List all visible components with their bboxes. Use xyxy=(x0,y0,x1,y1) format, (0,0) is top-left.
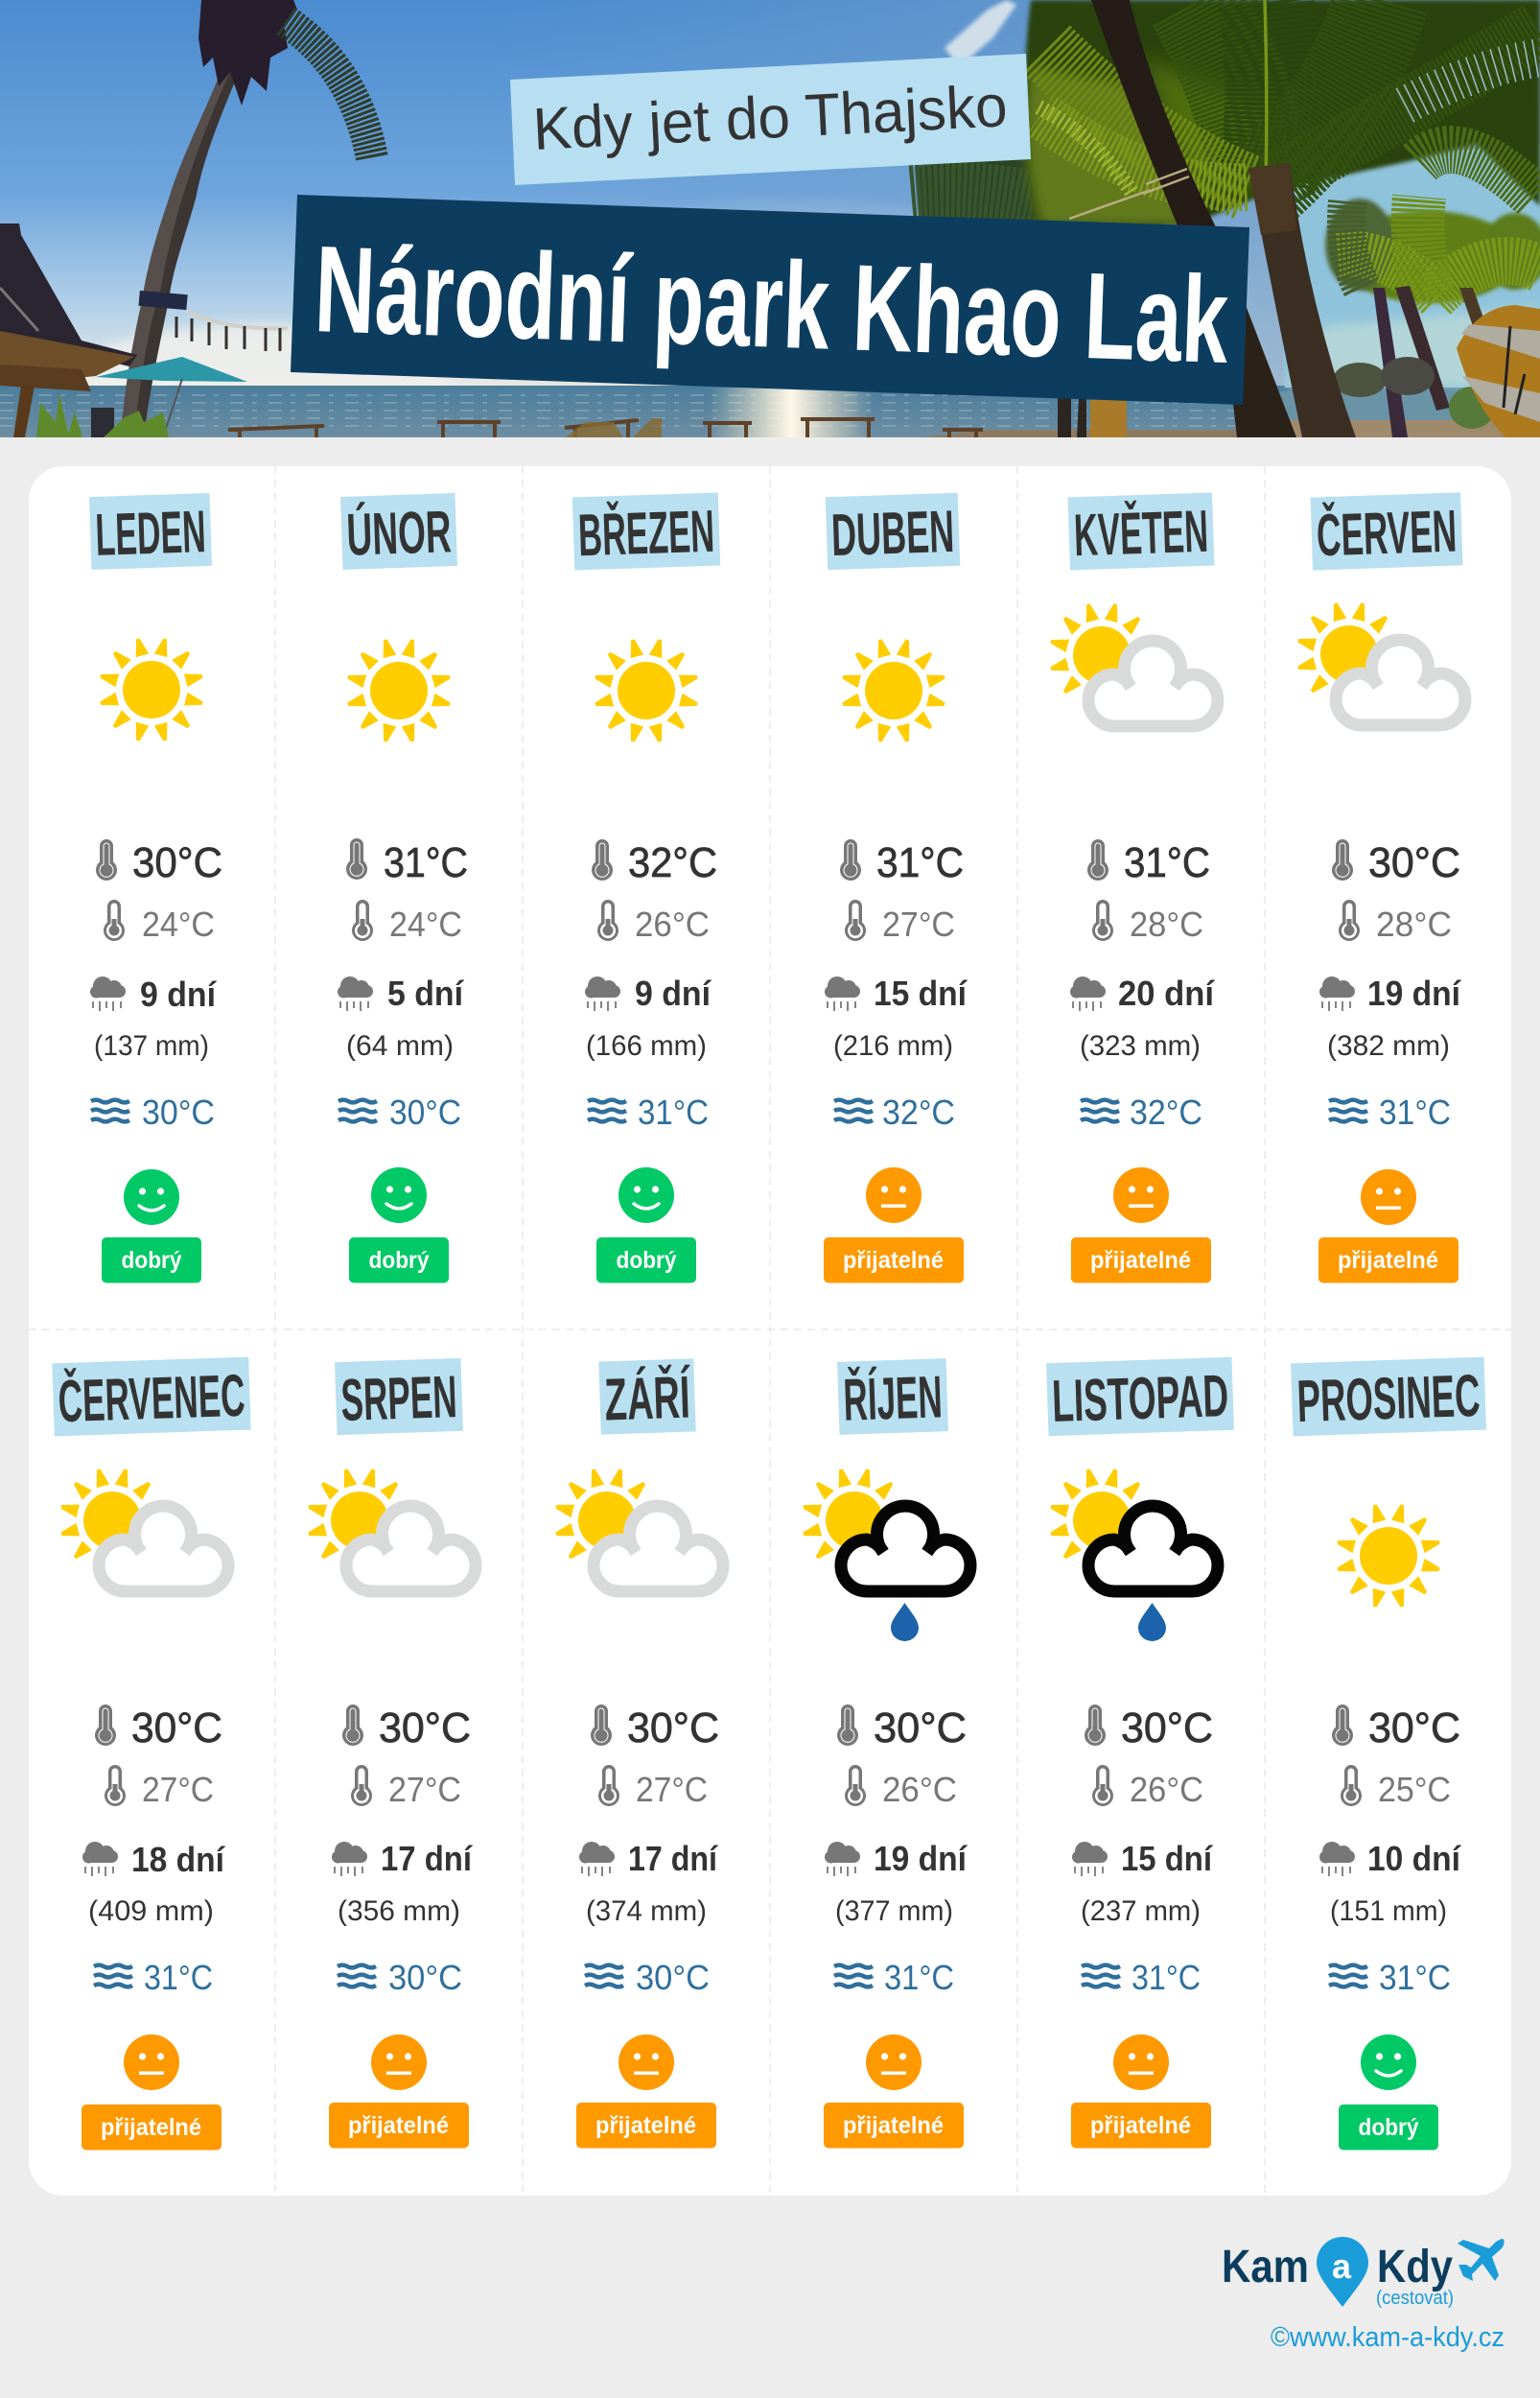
right trunks xyxy=(1091,0,1220,235)
sea temperature: 30°C xyxy=(142,1093,215,1132)
low temperature: 27°C xyxy=(636,1770,708,1809)
low temperature: 24°C xyxy=(389,905,462,944)
rating icon xyxy=(1361,2034,1416,2090)
rainy days xyxy=(90,975,217,1014)
sea temperature: 31°C xyxy=(884,1958,954,1997)
rating badge: přijatelné xyxy=(843,1247,944,1274)
rainy days xyxy=(825,974,968,1013)
high temperature xyxy=(592,839,717,886)
rainy days: 19 dní xyxy=(1367,974,1461,1013)
panel: Červenec xyxy=(52,1357,251,2151)
back palm xyxy=(913,159,1164,224)
low temperature: 28°C xyxy=(1130,905,1203,944)
month label: ČERVENEC xyxy=(57,1363,246,1435)
rating icon xyxy=(618,1167,674,1223)
header photo: beach with palms xyxy=(0,0,1540,437)
logo: Kam a Kdy xyxy=(1222,2237,1505,2309)
small trunks under banner xyxy=(1058,398,1086,437)
rainy days: 9 dní xyxy=(635,974,712,1013)
low temperature: 25°C xyxy=(1378,1770,1451,1809)
rating badge: přijatelné xyxy=(843,2112,944,2139)
rainy days: 15 dní xyxy=(1121,1839,1213,1878)
rainy days: 17 dní xyxy=(628,1839,718,1878)
rating badge: dobrý xyxy=(1358,2114,1419,2141)
sea temperature xyxy=(834,1093,955,1132)
sea temperature xyxy=(91,1093,215,1132)
rating icon xyxy=(371,1167,427,1223)
high temperature: 30°C xyxy=(379,1704,471,1751)
sea temperature xyxy=(94,1958,213,1997)
high temperature: 30°C xyxy=(1368,1704,1460,1751)
logo: Kam a Kdy: (cestovat) xyxy=(1376,2288,1454,2309)
rating icon xyxy=(1113,1167,1169,1223)
icon: sun xyxy=(1336,1503,1441,1609)
rainy days: 18 dní xyxy=(131,1840,225,1879)
rainy days xyxy=(332,1839,473,1878)
low temperature: 26°C xyxy=(882,1770,957,1809)
month label xyxy=(1046,1357,1234,1436)
icon: sun xyxy=(594,638,699,743)
rating icon xyxy=(866,2034,922,2090)
rating badge: přijatelné xyxy=(101,2114,201,2141)
sea temperature: 32°C xyxy=(882,1093,955,1132)
month label: ŘÍJEN xyxy=(842,1364,944,1434)
subtitle banner xyxy=(510,54,1031,185)
month label: BŘEZEN xyxy=(577,499,715,569)
rainfall amount: (137 mm) xyxy=(94,1030,209,1062)
low temperature xyxy=(845,1765,957,1809)
rainy days xyxy=(1070,974,1215,1013)
distant right sky xyxy=(1275,144,1540,388)
icon: airplane xyxy=(1458,2239,1505,2281)
month label xyxy=(335,1358,463,1435)
rating icon xyxy=(371,2034,427,2090)
low temperature xyxy=(845,900,955,944)
icon: sun xyxy=(99,637,204,742)
rating icon xyxy=(124,1169,179,1225)
high temperature xyxy=(95,1704,222,1751)
rainy days: 9 dní xyxy=(140,975,217,1014)
rating badge xyxy=(596,1237,696,1283)
icon: sun xyxy=(841,638,946,743)
panel: Říjen xyxy=(802,1358,970,2149)
month label: ÚNOR xyxy=(345,499,453,569)
sea temperature xyxy=(338,1093,461,1132)
rainy days xyxy=(1319,1839,1461,1878)
sea temperature: 31°C xyxy=(1132,1958,1201,1997)
rainfall amount: (374 mm) xyxy=(586,1895,707,1927)
low temperature xyxy=(1339,900,1452,944)
low temperature: 27°C xyxy=(882,905,955,944)
rating badge: přijatelné xyxy=(1090,1247,1191,1274)
month label xyxy=(1311,492,1462,571)
month label xyxy=(1068,493,1214,570)
month label: SRPEN xyxy=(339,1364,458,1434)
month label xyxy=(826,493,960,570)
rating icon xyxy=(1361,1169,1416,1225)
low temperature: 28°C xyxy=(1376,905,1452,944)
panel: Leden xyxy=(89,493,222,1283)
rainy days xyxy=(825,1839,968,1878)
rating badge xyxy=(1318,1237,1458,1283)
panel: Duben xyxy=(824,493,968,1283)
rainfall amount: (377 mm) xyxy=(835,1895,953,1927)
rainy days: 20 dní xyxy=(1118,974,1215,1013)
icon: sun behind cloud xyxy=(554,1468,723,1591)
high temperature xyxy=(1087,839,1210,886)
month label: LISTOPAD xyxy=(1051,1363,1229,1435)
low temperature: 27°C xyxy=(142,1770,214,1809)
rating badge xyxy=(1071,1237,1211,1283)
rating badge xyxy=(102,1237,201,1283)
sea temperature: 30°C xyxy=(388,1958,462,1997)
rainy days: 5 dní xyxy=(387,974,464,1013)
month label: DUBEN xyxy=(830,499,955,569)
rainy days xyxy=(82,1840,225,1879)
rating icon xyxy=(618,2034,674,2090)
big palm mass xyxy=(1025,0,1540,225)
rating badge xyxy=(1339,2104,1438,2151)
low temperature xyxy=(104,900,215,944)
low temperature xyxy=(1341,1765,1451,1809)
icon: sun behind cloud xyxy=(59,1468,228,1591)
sea temperature xyxy=(338,1958,462,1997)
rating badge: přijatelné xyxy=(348,2112,449,2139)
low temperature xyxy=(105,1765,214,1809)
logo: Kam a Kdy: Kam xyxy=(1222,2242,1309,2292)
rainfall amount: (216 mm) xyxy=(833,1030,953,1062)
high temperature: 31°C xyxy=(1124,839,1210,886)
rating icon xyxy=(866,1167,922,1223)
panel: Prosinec xyxy=(1291,1357,1486,2151)
month label xyxy=(837,1358,948,1435)
month label xyxy=(572,493,720,570)
panel: Březen xyxy=(572,493,720,1283)
left palm xyxy=(122,72,234,421)
month label xyxy=(340,493,457,570)
logo: Kam a Kdy: Kdy xyxy=(1377,2242,1453,2292)
rainy days xyxy=(338,974,464,1013)
icon: map pin xyxy=(1317,2237,1368,2307)
month label xyxy=(89,493,212,570)
title banner xyxy=(291,195,1249,405)
icon: sun, cloud and rain drop xyxy=(802,1468,970,1641)
panel: Listopad xyxy=(1046,1357,1234,2149)
rating badge: přijatelné xyxy=(1338,1247,1438,1274)
sea temperature: 31°C xyxy=(638,1093,709,1132)
sea temperature xyxy=(1081,1093,1202,1132)
surfboard xyxy=(1457,305,1540,437)
rainy days: 19 dní xyxy=(874,1839,968,1878)
rating badge: dobrý xyxy=(121,1247,182,1274)
sea temperature: 31°C xyxy=(144,1958,213,1997)
rating badge: dobrý xyxy=(616,1247,677,1274)
high temperature: 30°C xyxy=(132,839,222,886)
rating badge xyxy=(1071,2103,1211,2149)
rainfall amount: (64 mm) xyxy=(346,1030,454,1062)
low temperature: 27°C xyxy=(388,1770,461,1809)
icon: sun behind cloud xyxy=(307,1468,476,1591)
panel: Červen xyxy=(1296,492,1465,1283)
rating badge xyxy=(82,2104,222,2151)
sea temperature: 31°C xyxy=(1379,1958,1451,1997)
sea temperature xyxy=(588,1093,709,1132)
icon: sun xyxy=(346,638,452,743)
month label xyxy=(52,1357,251,1436)
rating badge xyxy=(824,1237,964,1283)
panel: Září xyxy=(554,1358,723,2149)
rainy days xyxy=(1319,974,1461,1013)
sea temperature: 31°C xyxy=(1379,1093,1451,1132)
low temperature: 26°C xyxy=(1130,1770,1203,1809)
rating icon xyxy=(1113,2034,1169,2090)
month label: ZÁŘÍ xyxy=(603,1365,692,1433)
high temperature: 32°C xyxy=(628,839,717,886)
high temperature: 30°C xyxy=(131,1704,222,1751)
icon: sun, cloud and rain drop xyxy=(1049,1468,1218,1641)
low temperature xyxy=(1092,900,1203,944)
rainfall amount: (382 mm) xyxy=(1327,1030,1450,1062)
rainy days xyxy=(1072,1839,1213,1878)
logo: Kam a Kdy: a xyxy=(1332,2246,1352,2286)
low temperature xyxy=(1092,1765,1203,1809)
rainy days: 17 dní xyxy=(381,1839,473,1878)
panel: Květen xyxy=(1049,493,1218,1283)
rainy days: 15 dní xyxy=(874,974,968,1013)
high temperature xyxy=(840,839,964,886)
month label xyxy=(598,1358,696,1435)
sea temperature: 32°C xyxy=(1130,1093,1202,1132)
left hut xyxy=(0,223,137,366)
rainfall amount: (356 mm) xyxy=(338,1895,460,1927)
high temperature: 31°C xyxy=(876,839,964,886)
rating badge xyxy=(329,2103,469,2149)
rating badge: přijatelné xyxy=(1090,2112,1191,2139)
rating icon xyxy=(124,2034,179,2090)
low temperature: 24°C xyxy=(142,905,215,944)
rainfall amount: (166 mm) xyxy=(586,1030,707,1062)
right-side palm cluster xyxy=(1360,207,1504,307)
rating badge xyxy=(349,1237,449,1283)
panel: Únor xyxy=(338,493,468,1283)
high temperature: 30°C xyxy=(874,1704,967,1751)
sea temperature xyxy=(585,1958,710,1997)
icon: sun behind cloud xyxy=(1296,601,1465,725)
panel: climate calendar card xyxy=(29,466,1511,2196)
rainy days: 10 dní xyxy=(1367,1839,1461,1878)
low temperature xyxy=(352,900,462,944)
sea temperature xyxy=(1329,1093,1451,1132)
icon: sun behind cloud xyxy=(1049,602,1218,726)
sea temperature xyxy=(1329,1958,1451,1997)
rainfall amount: (237 mm) xyxy=(1081,1895,1201,1927)
subtitle banner: Kdy jet do Thajsko xyxy=(531,73,1009,163)
high temperature xyxy=(96,839,222,886)
rating badge: přijatelné xyxy=(595,2112,696,2139)
rainfall amount: (409 mm) xyxy=(88,1895,214,1927)
rainy days xyxy=(579,1839,718,1878)
low temperature xyxy=(598,1765,708,1809)
month label: LEDEN xyxy=(94,499,207,569)
sea temperature xyxy=(834,1958,954,1997)
sea temperature: 30°C xyxy=(636,1958,710,1997)
high temperature xyxy=(346,838,468,886)
high temperature: 31°C xyxy=(384,839,468,886)
low temperature: 26°C xyxy=(635,905,710,944)
rainfall amount: (151 mm) xyxy=(1330,1895,1447,1927)
rainfall amount: (323 mm) xyxy=(1080,1030,1201,1062)
panel: Srpen xyxy=(307,1358,476,2149)
low temperature xyxy=(597,900,710,944)
beach tables xyxy=(228,419,983,437)
high temperature: 30°C xyxy=(1368,839,1460,886)
website copyright: ©www.kam-a-kdy.cz xyxy=(1271,2322,1505,2353)
rating badge xyxy=(824,2103,964,2149)
rating badge xyxy=(576,2103,716,2149)
rainy days xyxy=(585,974,712,1013)
sea temperature: 30°C xyxy=(389,1093,461,1132)
high temperature: 30°C xyxy=(1121,1704,1213,1751)
rating badge: dobrý xyxy=(368,1247,430,1274)
month label: KVĚTEN xyxy=(1073,499,1209,569)
sea temperature xyxy=(1082,1958,1201,1997)
low temperature xyxy=(351,1765,461,1809)
high temperature: 30°C xyxy=(627,1704,719,1751)
